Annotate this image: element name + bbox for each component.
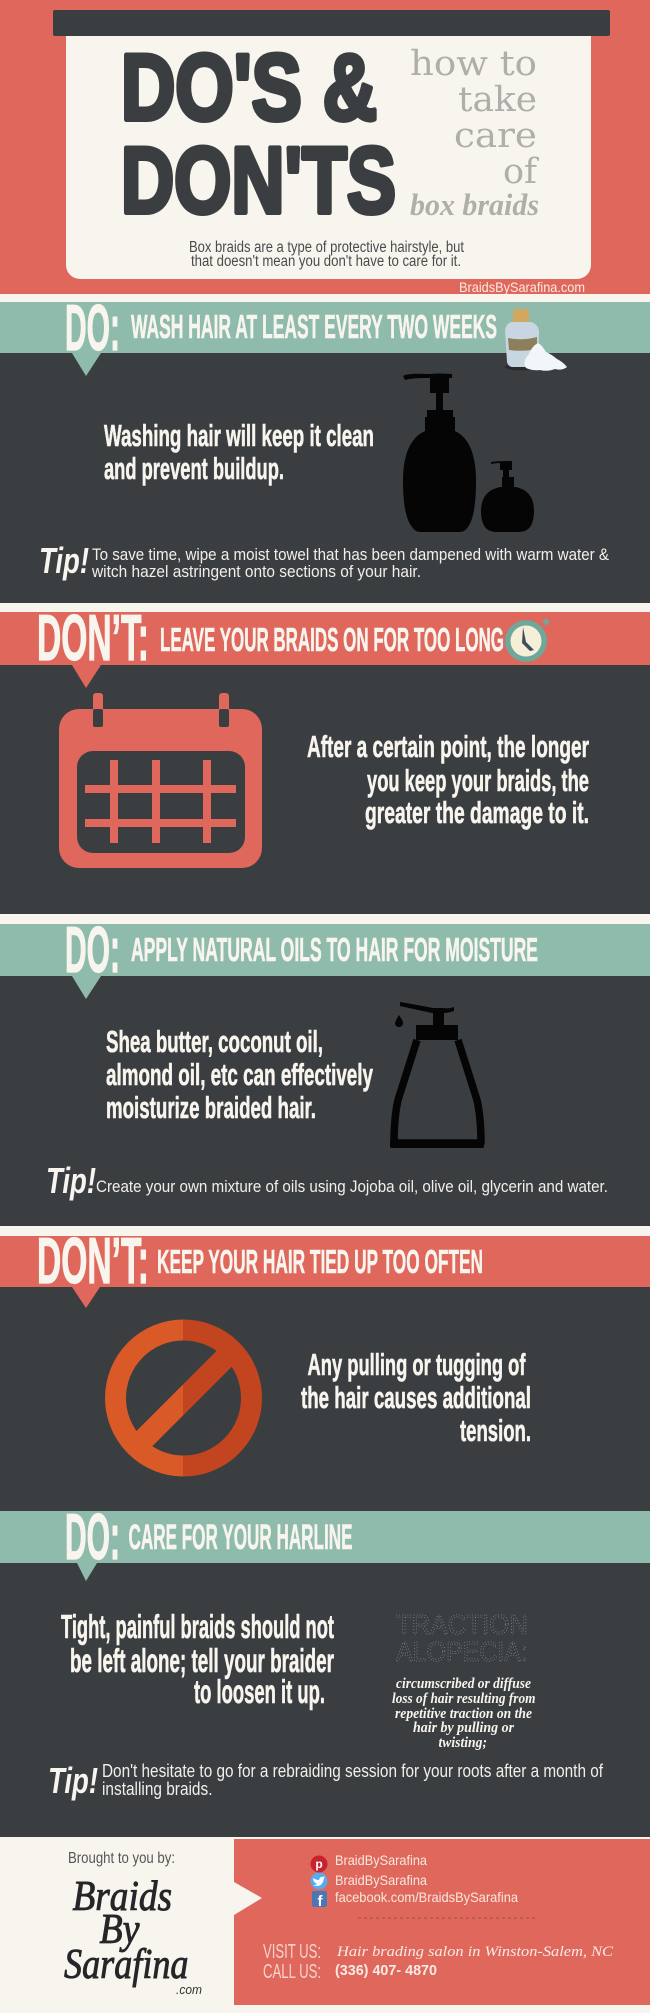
panel: do care for hairline: DO: [65, 1500, 120, 1573]
panel: do wash hair: DO: [65, 291, 120, 364]
body text [301, 1347, 531, 1448]
tip: Tip! [48, 1760, 98, 1801]
tip: Tip! [39, 540, 89, 581]
body text [307, 729, 589, 830]
social links [335, 1852, 518, 1905]
pointer [72, 665, 101, 688]
title [121, 34, 396, 232]
icon: oil bottle [390, 1002, 484, 1148]
pointer [72, 976, 101, 999]
subtitle: how to [410, 44, 537, 84]
icon: twitter [310, 1872, 328, 1890]
panel: don't keep hair tied [0, 1226, 650, 1476]
logo [64, 1874, 202, 1997]
contact labels: CALL US: [263, 1961, 321, 1983]
footer arrow [234, 1882, 262, 1915]
definition text: circumscribed or diffuse [396, 1676, 531, 1692]
panel: do apply oils [0, 913, 650, 1226]
panel: do apply oils: DO: [65, 913, 120, 986]
definition text: loss of hair resulting from [392, 1691, 536, 1707]
contact labels: VISIT US: [263, 1941, 321, 1963]
body text: to loosen it up. [194, 1673, 325, 1710]
tip: witch hazel astringent onto sections of your hair. [91, 563, 421, 581]
label DON'T: DON’T: [37, 601, 149, 674]
icon: clock [505, 619, 549, 662]
icon: facebook [312, 1891, 327, 1910]
body text: almond oil, etc can effectively [106, 1057, 373, 1092]
subtitle [410, 44, 540, 222]
subtitle: care [454, 116, 537, 156]
social links: BraidBySarafina [335, 1872, 427, 1888]
definition text: repetitive traction on the [395, 1706, 532, 1722]
logo: By [100, 1907, 140, 1953]
intro text: that doesn't mean you don't have to care for it. [191, 253, 461, 270]
panel: do wash hair [0, 291, 650, 603]
panel: footer [0, 1837, 650, 2013]
icon: pinterest [310, 1856, 328, 1872]
contact details: (336) 407- 4870 [335, 1962, 437, 1979]
body text [106, 1024, 373, 1125]
definition title: ALOPECIA: [396, 1636, 528, 1667]
icon: prohibition sign [116, 1330, 252, 1466]
panel: do care for hairline: CARE FOR YOUR HARLINE [128, 1518, 352, 1557]
body text: be left alone; tell your braider [70, 1642, 334, 1679]
intro text: Box braids are a type of protective hairstyle, but [189, 239, 465, 256]
tip: To save time, wipe a moist towel that has been dampened with warm water & [92, 546, 609, 564]
pointer [72, 353, 101, 376]
body text [61, 1608, 334, 1710]
tip [39, 540, 609, 581]
body text: Shea butter, coconut oil, [106, 1024, 323, 1059]
icon: pinterest: p [315, 1857, 323, 1871]
website: BraidsBySarafina.com [459, 279, 585, 295]
subtitle: of [503, 152, 540, 192]
tip: Tip! [46, 1160, 96, 1201]
tip: installing braids. [102, 1779, 212, 1799]
body text: and prevent buildup. [104, 451, 284, 486]
dark header bar [53, 10, 610, 36]
intro text [189, 239, 465, 270]
cream card [66, 36, 591, 279]
subtitle: box braids [410, 187, 539, 222]
title: DO'S & [121, 34, 377, 140]
title: DON'TS [121, 128, 396, 232]
definition text: hair by pulling or [413, 1720, 514, 1736]
logo: .com [176, 1982, 202, 1997]
icon: pump bottles [403, 374, 534, 532]
body text: Tight, painful braids should not [61, 1608, 334, 1645]
panel: do care for hairline [0, 1500, 650, 1837]
label DON'T: DON’T: [37, 1224, 149, 1297]
definition title [396, 1609, 528, 1667]
logo: Braids [72, 1874, 172, 1920]
body text: Washing hair will keep it clean [104, 418, 374, 453]
body text [104, 418, 374, 486]
body text: moisturize braided hair. [106, 1090, 316, 1125]
body text: tension. [460, 1413, 531, 1448]
tip [48, 1760, 604, 1801]
contact details: Hair brading salon in Winston-Salem, NC [336, 1944, 614, 1960]
contact labels [263, 1941, 321, 1983]
social links: facebook.com/BraidsBySarafina [335, 1889, 518, 1905]
icon: dry shampoo [505, 309, 567, 371]
tip [46, 1160, 608, 1201]
social links: BraidBySarafina [335, 1852, 427, 1868]
contact details [335, 1944, 614, 1979]
logo: Sarafina [64, 1942, 188, 1988]
panel: header [0, 0, 650, 295]
definition title: TRACTION [396, 1609, 528, 1640]
pointer [77, 1563, 97, 1581]
pointer [72, 1287, 100, 1308]
panel: don't leave braids [0, 601, 650, 914]
credit line: Brought to you by: [68, 1850, 175, 1867]
icon: facebook: f [318, 1893, 324, 1910]
definition text [392, 1676, 536, 1751]
icon: calendar [59, 693, 262, 868]
tip: Create your own mixture of oils using Jojoba oil, olive oil, glycerin and water. [96, 1178, 608, 1196]
subtitle: take [458, 80, 537, 120]
definition text: twisting; [438, 1735, 487, 1751]
